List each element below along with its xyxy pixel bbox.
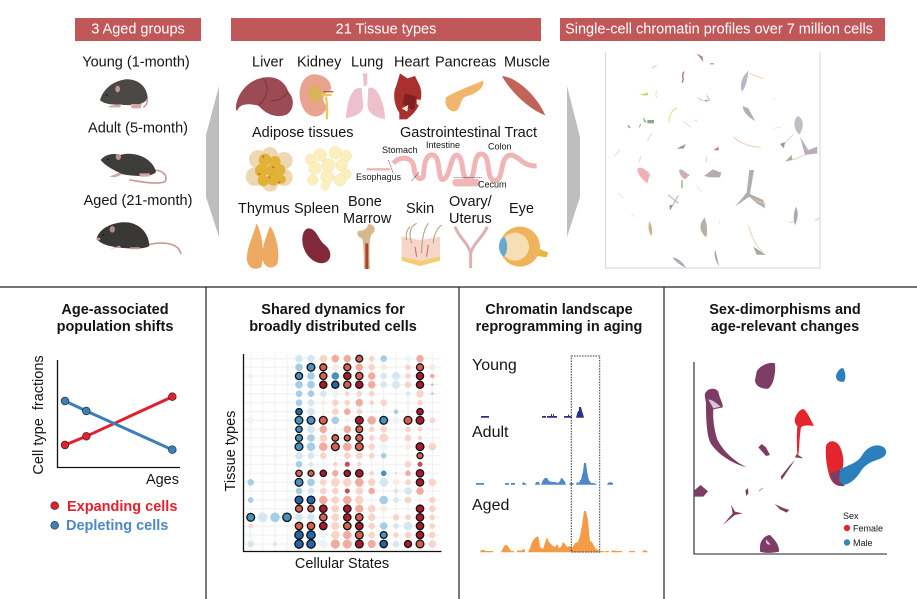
title: reprogramming in aging	[476, 319, 642, 335]
dot matrix chart: Cellular States	[295, 556, 389, 572]
title	[476, 302, 642, 335]
icon: skin	[402, 223, 442, 266]
label: aged: Aged (21-month)	[84, 193, 192, 209]
legend: sex: Sex	[843, 511, 859, 521]
icon: young mouse	[100, 79, 147, 108]
label: adult: Adult (5-month)	[88, 120, 188, 136]
icon: adult mouse	[101, 154, 166, 183]
tissue labels: Eye	[509, 201, 534, 217]
umap scatter	[694, 362, 887, 554]
legend: sex: Male	[853, 538, 873, 548]
line chart: Ages	[146, 472, 179, 488]
tissue labels: Spleen	[294, 201, 339, 217]
track: young	[472, 357, 584, 418]
title	[249, 302, 417, 335]
heading: single-cell chromatin profiles	[560, 18, 885, 41]
icon: ovary uterus	[455, 227, 487, 268]
line chart: Cell type fractions	[31, 355, 47, 475]
line chart	[31, 355, 180, 488]
icon: bone	[357, 224, 375, 269]
icon: aged mouse	[96, 222, 181, 254]
tissue labels: Bone	[348, 194, 382, 210]
dot matrix chart	[223, 354, 442, 572]
icon: gastrointestinal tract	[367, 154, 537, 183]
labels: gastrointestinal parts: Cecum	[478, 180, 507, 190]
labels: gastrointestinal parts: Colon	[488, 142, 512, 152]
tissue labels: Lung	[351, 54, 383, 70]
tissue labels: Marrow	[343, 211, 392, 227]
arrow: right funnel	[567, 86, 580, 237]
tissue labels: Skin	[406, 201, 434, 217]
icon: adipose brown	[246, 147, 293, 192]
legend: sex	[843, 511, 883, 548]
labels: gastrointestinal parts: Intestine	[426, 140, 460, 150]
tissue labels: Uterus	[449, 211, 492, 227]
legend	[51, 499, 177, 534]
dot matrix chart: Tissue types	[223, 411, 239, 491]
title: age-relevant changes	[711, 319, 859, 335]
heading: 21 tissue types	[231, 18, 541, 41]
labels: gastrointestinal parts: Stomach	[382, 145, 418, 155]
title	[709, 302, 861, 335]
legend: sex: Female	[853, 524, 883, 534]
tissue labels: Thymus	[238, 201, 290, 217]
track: young: Young	[472, 357, 517, 374]
panel: chromatin landscape	[472, 302, 648, 552]
tissue labels	[238, 54, 550, 227]
tissue labels: Muscle	[504, 54, 550, 70]
tissue labels: Liver	[252, 54, 284, 70]
labels: gastrointestinal parts: Esophagus	[356, 172, 402, 182]
panel: population shifts	[31, 302, 180, 534]
title: broadly distributed cells	[249, 319, 417, 335]
tissue labels: Ovary/	[449, 194, 493, 210]
icon: lung	[346, 73, 385, 119]
icon: liver	[236, 77, 293, 116]
tissue icons	[236, 73, 548, 269]
heading: 21 tissue types: 21 Tissue types	[336, 22, 436, 38]
labels: gastrointestinal parts	[356, 140, 512, 190]
tissue labels: Adipose tissues	[252, 125, 354, 141]
track: aged: Aged	[472, 497, 509, 514]
label: young: Young (1-month)	[82, 54, 190, 70]
tissue labels: Kidney	[297, 54, 342, 70]
panel: sex dimorphism	[694, 302, 887, 554]
arrow: left funnel	[206, 86, 219, 237]
panel: tissue types	[236, 54, 550, 269]
track: adult	[472, 424, 613, 485]
panel: aged groups	[82, 54, 192, 254]
highlight box	[571, 356, 600, 552]
callout lines: gastrointestinal	[388, 160, 482, 181]
heading: 3 aged groups	[75, 18, 201, 41]
title: population shifts	[57, 319, 173, 335]
panel: global UMAP of single-cell chromatin profiles	[606, 52, 820, 268]
track: aged	[472, 497, 648, 552]
title	[57, 302, 173, 335]
heading: 3 aged groups: 3 Aged groups	[91, 22, 185, 38]
icon: spleen	[302, 228, 330, 263]
tissue labels: Pancreas	[435, 54, 496, 70]
icon: pancreas	[445, 81, 483, 111]
tissue labels: Heart	[394, 54, 429, 70]
title: Shared dynamics for	[261, 302, 405, 318]
panel: shared dynamics	[223, 302, 442, 572]
title: Sex-dimorphisms and	[709, 302, 861, 318]
icon: muscle	[502, 76, 545, 115]
icon: kidney	[300, 74, 333, 119]
icon: eye	[499, 227, 548, 267]
track: adult: Adult	[472, 424, 509, 441]
legend: Expanding cells	[67, 499, 177, 515]
icon: heart	[394, 73, 422, 119]
icon: thymus	[247, 223, 278, 269]
heading: single-cell chromatin profiles: Single-cell chromatin profiles over 7 million cells	[565, 22, 873, 38]
icon: adipose white	[305, 146, 352, 190]
legend: Depleting cells	[66, 518, 168, 534]
title: Chromatin landscape	[485, 302, 633, 318]
tissue labels: Gastrointestinal Tract	[400, 125, 537, 141]
title: Age-associated	[61, 302, 169, 318]
